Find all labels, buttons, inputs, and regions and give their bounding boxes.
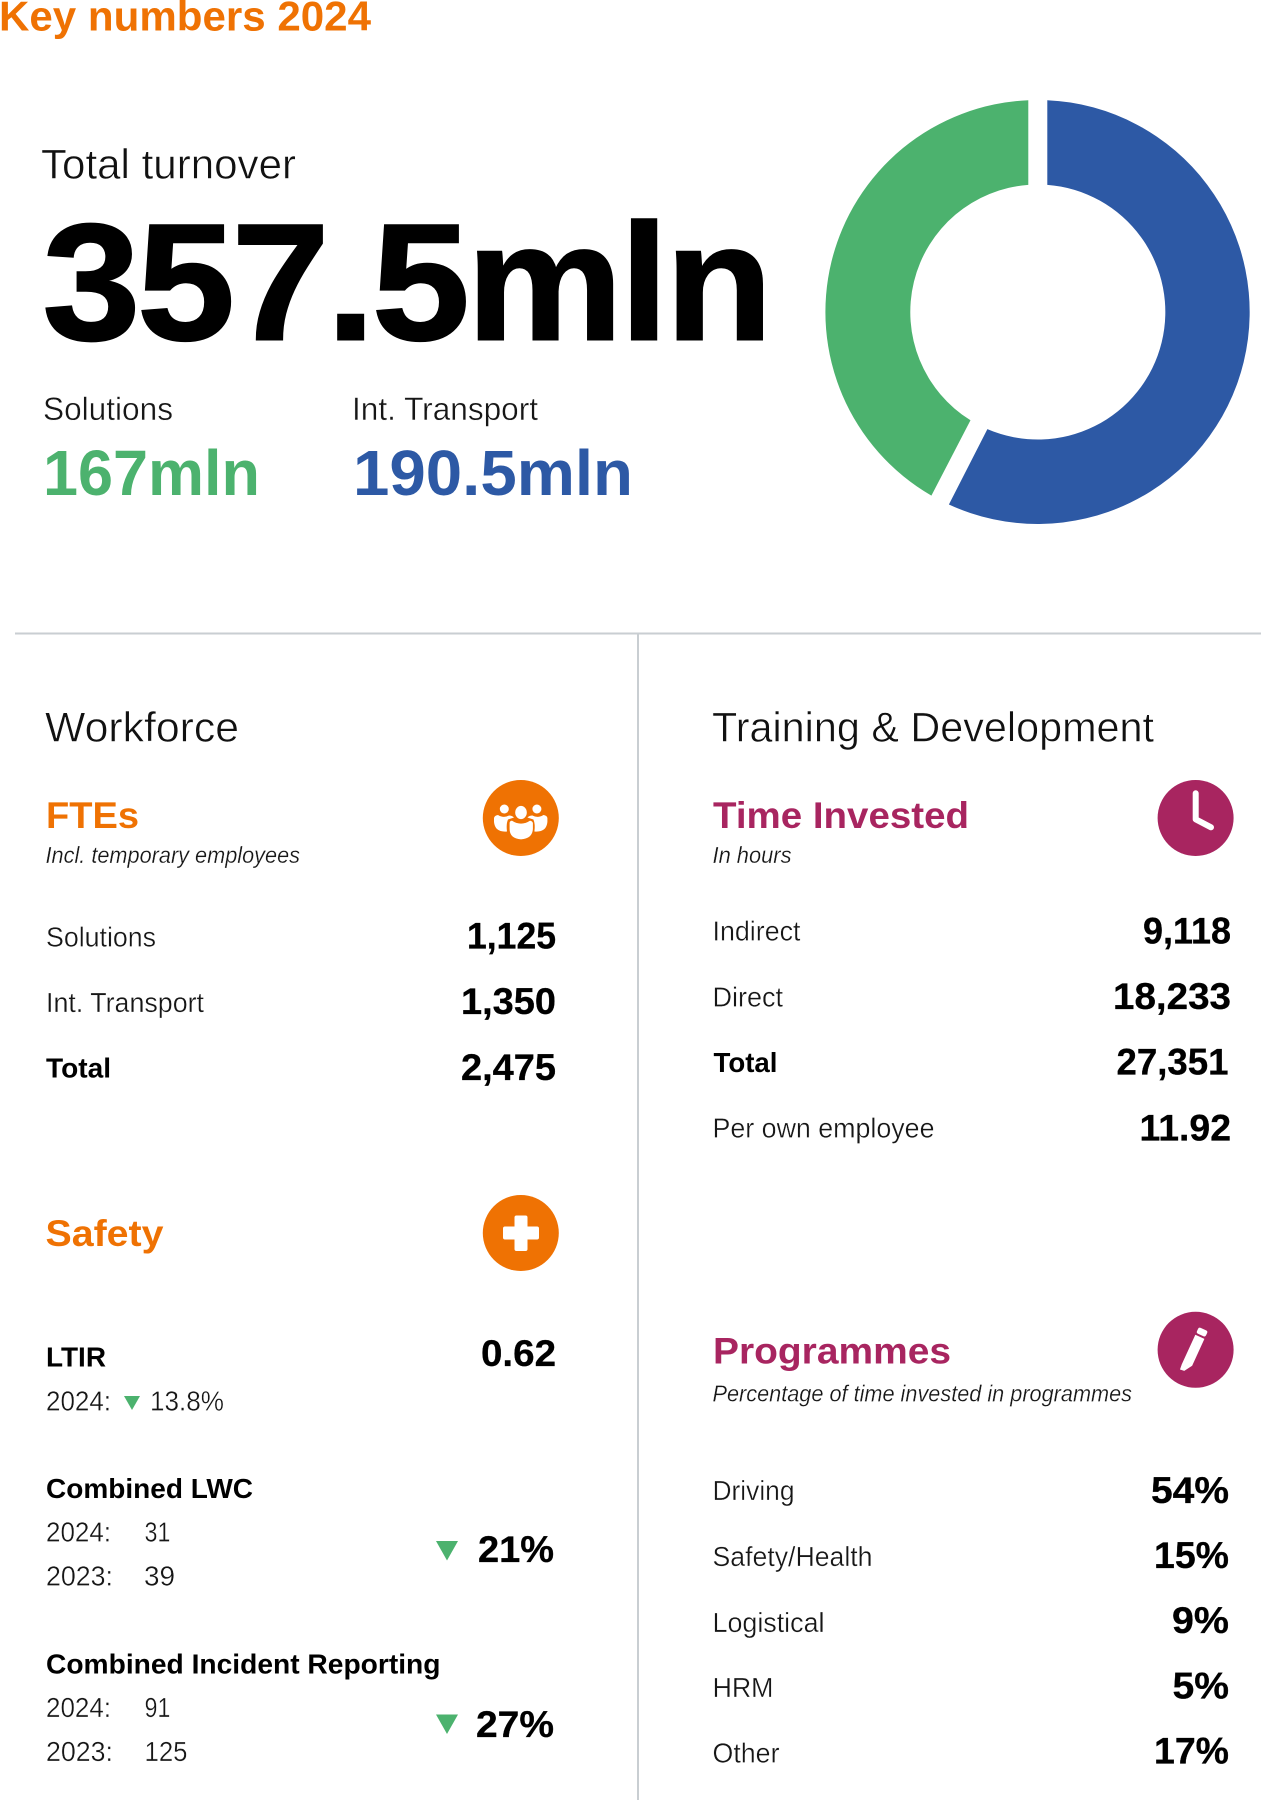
LTIR block: 0.62 [481,1333,556,1374]
icon: plus [483,1195,559,1271]
row: safety/health [712,1535,1229,1576]
row: solutions: Solutions [46,922,156,952]
Combined Incident Reporting block [46,1648,554,1767]
row: total: 27,351 [1116,1042,1228,1082]
row: indirect [712,910,1231,952]
programmes heading: Programmes [713,1330,951,1372]
row: total [46,1047,556,1088]
row: per own employee: Per own employee [712,1112,934,1144]
Combined LWC block: Combined LWC [46,1473,253,1504]
Combined LWC block: 31 [144,1516,170,1548]
panel: safety [46,1195,559,1767]
row: indirect: Indirect [712,916,801,946]
training heading: Training & Development [712,704,1154,750]
row: direct: 18,233 [1113,976,1231,1017]
row: solutions: 1,125 [467,916,556,956]
row: driving: 54% [1151,1470,1229,1511]
row: direct [712,976,1231,1017]
row: HRM: HRM [712,1672,774,1703]
LTIR block: 13.8% [150,1386,224,1416]
Combined Incident Reporting block: 91 [144,1692,170,1723]
icon: clock [1158,780,1234,856]
Combined LWC block: 2023: [46,1560,113,1592]
arrow: down [436,1541,458,1560]
arrow: down [124,1396,140,1410]
Combined LWC block: 2024: [46,1516,111,1548]
row: total: 2,475 [461,1047,556,1088]
arrow: down [436,1714,458,1734]
icon: pencil [1158,1312,1234,1388]
Combined Incident Reporting block: 27% [476,1704,554,1745]
row: total [714,1042,1228,1082]
time invested note: In hours [712,842,792,868]
row: other [712,1730,1229,1772]
turnover figure: 357.5mln [42,190,773,375]
row: per own employee [712,1108,1231,1148]
time invested heading: Time Invested [713,795,969,836]
FTEs note: Incl. temporary employees [46,842,300,868]
solutions figure: 167mln [43,437,260,509]
row: total: Total [714,1047,778,1078]
row: direct: Direct [712,982,783,1012]
Combined Incident Reporting block: 2023: [46,1736,113,1767]
icon: people [483,780,559,856]
Combined LWC block [46,1473,554,1592]
Combined Incident Reporting block: 2024: [46,1692,111,1723]
row: int. transport [46,981,556,1022]
donut segment: int. transport [949,100,1250,524]
row: driving: Driving [712,1475,794,1506]
row: safety/health: Safety/Health [712,1541,872,1572]
international transport label: Int. Transport [352,391,538,427]
Combined LWC block: 39 [144,1560,175,1592]
workforce heading: Workforce [45,704,239,750]
row: HRM [712,1666,1229,1706]
solutions label: Solutions [43,391,173,427]
row: HRM: 5% [1172,1666,1229,1706]
safety heading: Safety [46,1213,164,1254]
row: other: 17% [1154,1730,1229,1772]
international transport figure: 190.5mln [353,437,633,509]
row: int. transport: 1,350 [461,981,556,1022]
turnover label: Total turnover [41,140,296,188]
panel: total turnover [41,140,773,509]
row: logistical: 9% [1172,1600,1229,1641]
row: other: Other [712,1738,780,1768]
panel: programmes [712,1312,1234,1772]
row: indirect: 9,118 [1143,910,1231,952]
row: solutions [46,916,556,956]
Combined Incident Reporting block: 125 [144,1736,188,1767]
Combined LWC block: 21% [478,1529,554,1570]
FTEs heading: FTEs [46,795,139,836]
panel: workforce [45,704,559,1088]
row: total: Total [46,1052,111,1084]
row: logistical [712,1600,1229,1641]
row: safety/health: 15% [1154,1535,1229,1576]
Combined Incident Reporting block: Combined Incident Reporting [46,1648,440,1680]
LTIR block [46,1333,556,1416]
row: per own employee: 11.92 [1140,1108,1231,1148]
row: int. transport: Int. Transport [46,987,204,1018]
LTIR block: 2024: [46,1386,111,1416]
panel: training and development [712,704,1234,1148]
row: logistical: Logistical [712,1607,824,1638]
donut segment: solutions [825,100,1028,496]
programmes note: Percentage of time invested in programmes [712,1380,1132,1406]
LTIR block: LTIR [46,1342,106,1372]
row: driving [712,1470,1229,1511]
donut chart [825,100,1250,524]
